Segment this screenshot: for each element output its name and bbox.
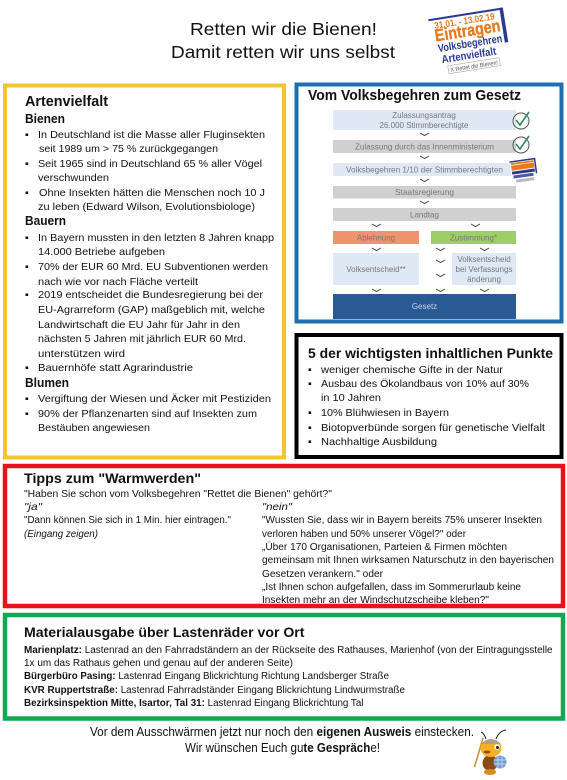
heading: Vom Volksbegehren zum Gesetz: Vom Volksbegehren zum Gesetz xyxy=(308,87,521,104)
bullet list: Punkte: ▪ xyxy=(308,436,312,448)
text: closing message xyxy=(90,725,474,755)
section: Bienen xyxy=(25,111,265,213)
column: nein: „Ist Ihnen schon aufgefallen, dass im Sommerurlaub keine xyxy=(262,582,521,593)
icon: bee mascot xyxy=(474,730,506,775)
arrows: chevrons between steps xyxy=(372,133,489,292)
text: Standorte: Bürgerbüro Pasing: Lastenrad Eingang Blickrichtung Richtung Landsberger Straße xyxy=(24,671,389,682)
step: Staatsregierung xyxy=(333,186,516,198)
section: Bauern: ▪ xyxy=(25,289,29,301)
bullet list: Punkte: Nachhaltige Ausbildung xyxy=(321,436,437,448)
section: Bienen: Ohne Insekten hätten die Menschen noch 10 J xyxy=(39,187,265,199)
section: Blumen xyxy=(25,375,271,434)
section: Bienen: seit 1989 um > 75 % zurückgegangen xyxy=(39,143,218,155)
text: Standorte: 1x um das Rathaus gehen und genau auf der anderen Seite) xyxy=(24,658,293,669)
bullet list: Punkte: 10% Blühwiesen in Bayern xyxy=(321,407,449,419)
panel: 5 der wichtigsten inhaltlichen Punkte xyxy=(296,335,562,457)
column: nein xyxy=(262,502,554,606)
heading: Tipps: Tipps zum "Warmwerden" xyxy=(24,470,201,486)
logo: Eintragen stamp xyxy=(428,7,512,76)
icon: check mark 1 xyxy=(513,112,529,129)
text: Standorte xyxy=(24,645,553,709)
section: Blumen: Bestäuben angewiesen xyxy=(38,422,150,434)
section: Bauern: Landwirtschaft die EU Jahr für Jahr in den xyxy=(38,319,240,331)
heading: Artenvielfalt: Artenvielfalt xyxy=(25,93,108,110)
column: nein: Insekten mehr an der Windschutzscheibe kleben?" xyxy=(262,595,489,606)
bullet list: Punkte: in 10 Jahren xyxy=(321,392,381,404)
step: Zulassungsantrag: Zulassungsantrag xyxy=(392,111,456,120)
bullet list: Punkte: weniger chemische Gifte in der Natur xyxy=(320,364,504,376)
column: ja: "Dann können Sie sich in 1 Min. hier eintragen." xyxy=(24,515,231,526)
bullet list: Punkte: ▪ xyxy=(308,364,312,376)
step: Volksentscheid bei Verfassungsänderung: änderung xyxy=(467,275,501,284)
title xyxy=(171,19,395,62)
step: Staatsregierung: Staatsregierung xyxy=(395,188,454,197)
section: Bauern: ▪ xyxy=(25,362,29,374)
section: Bienen: ▪ xyxy=(25,158,29,170)
column: nein: „Über 170 Organisationen, Parteien & Firmen möchten xyxy=(262,541,507,553)
section: Bauern: unterstützen wird xyxy=(38,348,125,360)
section: Bienen: ▪ xyxy=(25,187,29,199)
section: Bauern xyxy=(25,213,274,374)
bullet list: Punkte: ▪ xyxy=(308,378,312,390)
step: Volksbegehren: Volksbegehren 1/10 der Stimmberechtigten xyxy=(346,166,503,174)
section: Blumen: ▪ xyxy=(25,393,29,405)
section: Bienen: In Deutschland ist die Masse aller Fluginsekten xyxy=(38,129,265,141)
icon: mini Eintragen stamp xyxy=(509,158,538,185)
column: nein: Gesetzen verankern." oder xyxy=(262,569,384,580)
logo: Eintragen stamp: X Rettet die Bienen! xyxy=(450,60,499,74)
step: Volksentscheid bei Verfassungsänderung xyxy=(452,253,516,285)
step: Landtag: Landtag xyxy=(410,210,439,220)
title: Retten wir die Bienen! xyxy=(190,19,377,39)
step: Volksentscheid bei Verfassungsänderung: Volksentscheid xyxy=(457,255,511,264)
step: Zulassungsantrag xyxy=(333,110,516,130)
bullet list: Punkte: ▪ xyxy=(308,407,312,419)
column: ja: "ja" xyxy=(24,502,43,513)
step: Volksentscheid xyxy=(333,253,419,285)
step: Landtag xyxy=(333,208,516,221)
section: Bauern: ▪ xyxy=(25,232,29,244)
section: Bienen: verschwunden xyxy=(38,172,109,184)
section: Bienen: Seit 1965 sind in Deutschland 65 % aller Vögel xyxy=(38,158,262,170)
bullet list: Punkte: ▪ xyxy=(308,422,312,434)
flowchart: path to law xyxy=(333,110,538,319)
section: Blumen: 90% der Pflanzenarten sind auf Insekten zum xyxy=(38,408,257,420)
section: Bauern: ▪ xyxy=(25,261,29,273)
step: Zulassungsantrag: 26.000 Stimmberechtigte xyxy=(380,121,469,130)
bullet list: Punkte: Biotopverbünde sorgen für genetische Vielfalt xyxy=(321,422,545,434)
section: Bauern: Bauernhöfe statt Agrarindustrie xyxy=(38,362,193,374)
panel: Materialausgabe xyxy=(5,615,563,718)
text: question: "Haben Sie schon vom Volksbegehren "Rettet die Bienen" gehört?" xyxy=(24,489,332,500)
step: Volksentscheid: Volksentscheid** xyxy=(346,265,406,274)
step: Volksbegehren xyxy=(333,163,516,176)
section: Blumen: Blumen xyxy=(25,375,69,390)
panel: Tipps zum Warmwerden xyxy=(5,466,563,606)
section: Bauern: nächsten 5 Jahren mit jährlich EUR 60 Mrd. xyxy=(38,333,246,345)
column: nein: verloren haben und 50% unserer Vögel?" oder xyxy=(262,529,467,540)
section: Bauern: 2019 entscheidet die Bundesregierung bei der xyxy=(38,289,264,301)
text: closing message: Vor dem Ausschwärmen jetzt nur noch den eigenen Ausweis einstecken. xyxy=(90,725,474,739)
step: Gesetz xyxy=(333,294,516,319)
logo: Eintragen stamp: Eintragen xyxy=(433,16,502,45)
text: Standorte: KVR Ruppertstraße: Lastenrad Fahrradständer Eingang Blickrichtung Lindwurmstraße xyxy=(24,685,405,696)
logo: Eintragen stamp: Artenvielfalt xyxy=(441,46,497,66)
column: nein: "Wussten Sie, dass wir in Bayern bereits 75% unserer Insekten xyxy=(262,515,542,526)
section: Bauern: Bauern xyxy=(25,213,66,228)
step: Zustimmung xyxy=(431,231,516,244)
section: Blumen: Vergiftung der Wiesen und Äcker mit Pestiziden xyxy=(38,393,271,405)
text: Standorte: Marienplatz: Lastenrad an den Fahrradständern an der Rückseite des Rathauses, Marienhof (von der Eintragungsstelle xyxy=(24,645,553,656)
section: Bauern: 70% der EUR 60 Mrd. EU Subventionen werden xyxy=(38,261,268,273)
step: Ablehnung: Ablehnung xyxy=(357,234,395,242)
bullet list: Punkte: Ausbau des Ökolandbaus von 10% auf 30% xyxy=(321,378,529,390)
section: Bauern: nach wie vor nach Fläche verteilt xyxy=(38,276,198,288)
section: Bienen: ▪ xyxy=(25,129,29,141)
section: Bienen: Bienen xyxy=(25,111,65,126)
column: nein: "nein" xyxy=(262,502,293,513)
text: closing message: Wir wünschen Euch gute Gespräche! xyxy=(185,741,380,755)
panel: Vom Volksbegehren zum Gesetz xyxy=(296,84,562,322)
step: Gesetz: Gesetz xyxy=(412,302,437,311)
bullet list: Punkte xyxy=(308,364,545,448)
heading: Materialausgabe: Materialausgabe über Lastenräder vor Ort xyxy=(24,624,305,640)
heading: 5 Punkte: 5 der wichtigsten inhaltlichen Punkte xyxy=(308,346,554,361)
column: nein: gemeinsam mit Ihnen wirksamen Naturschutz in den bayerischen xyxy=(262,555,554,566)
panel: Artenvielfalt xyxy=(5,86,284,458)
step: Ablehnung xyxy=(333,231,419,244)
step: Zulassung durch das Innenministerium xyxy=(333,140,516,153)
step: Zustimmung: Zustimmung* xyxy=(450,234,497,242)
column: ja: (Eingang zeigen) xyxy=(24,529,98,540)
section: Bauern: In Bayern mussten in den letzten 8 Jahren knapp xyxy=(38,232,274,244)
section: Blumen: ▪ xyxy=(25,408,29,420)
icon: check mark 2 xyxy=(513,136,529,153)
title: Damit retten wir uns selbst xyxy=(171,42,395,62)
step: Zulassung durch das Innenministerium: Zulassung durch das Innenministerium xyxy=(355,142,494,152)
text: Standorte: Bezirksinspektion Mitte, Isartor, Tal 31: Lastenrad Eingang Blickrichtung Tal xyxy=(24,698,364,709)
section: Bienen: zu leben (Edward Wilson, Evolutionsbiologe) xyxy=(38,201,255,213)
section: Bauern: EU-Agrarreform (GAP) maßgeblich mit, welche xyxy=(38,304,265,316)
section: Bauern: 14.000 Betriebe aufgeben xyxy=(38,246,165,258)
step: Volksentscheid bei Verfassungsänderung: bei Verfassungs xyxy=(456,265,512,274)
logo: Eintragen stamp: 31.01. - 13.02.19 xyxy=(434,11,496,32)
column: ja xyxy=(24,502,231,540)
logo: Eintragen stamp: Volksbegehren xyxy=(437,33,503,55)
